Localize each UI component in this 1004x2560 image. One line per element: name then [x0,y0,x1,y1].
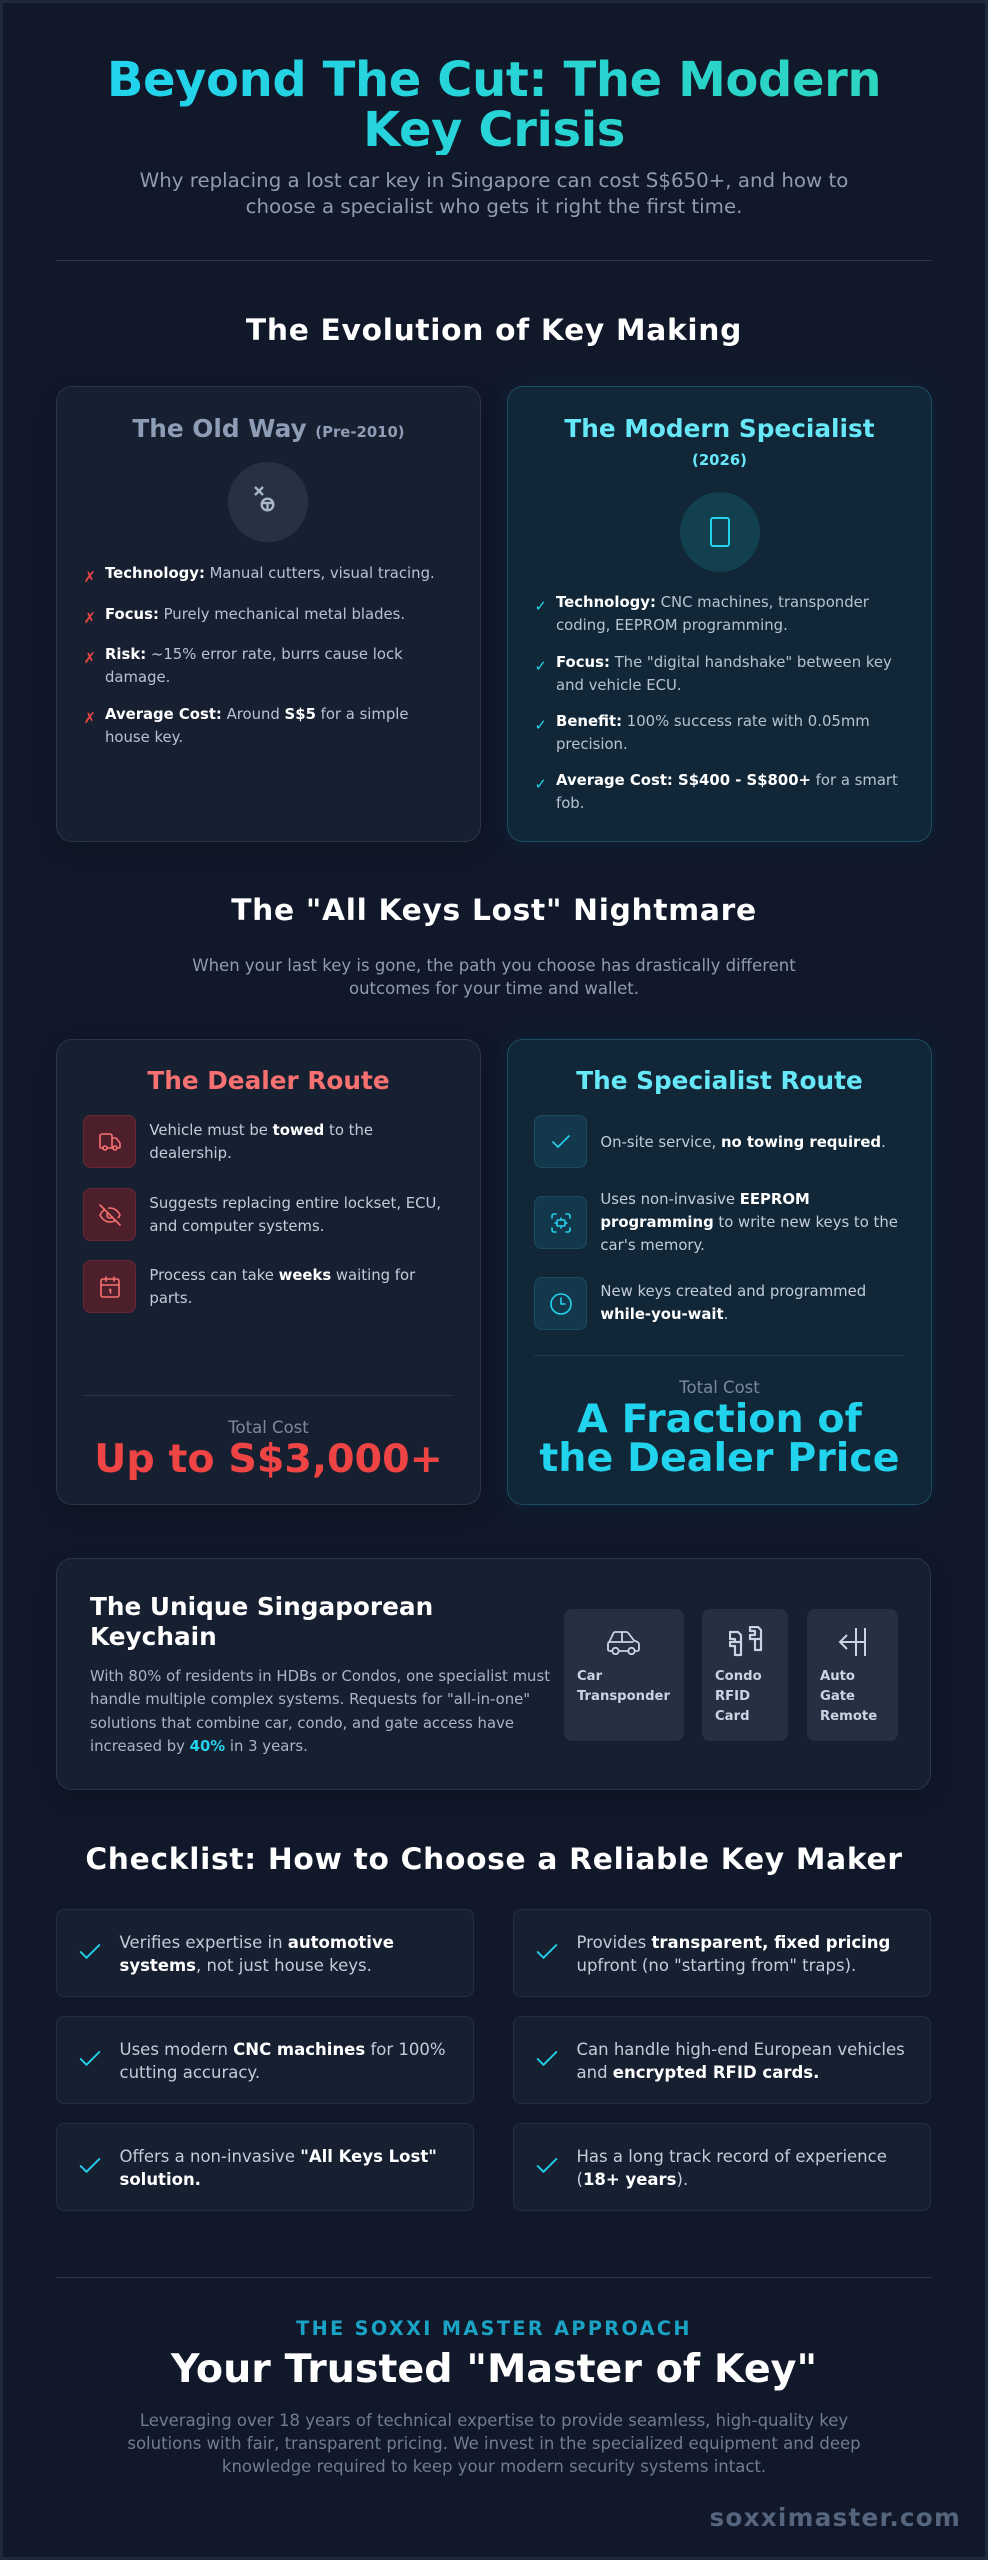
section intro: outcomes for your time and wallet. [349,979,639,998]
heading: evolution: The Evolution of Key Making [246,312,742,348]
total cost value: Up to S$3,000+ [94,1436,443,1482]
step text [149,1266,416,1306]
step text: while-you-wait. [600,1304,728,1322]
keychain text [90,1667,550,1755]
chip label: Car [577,1669,602,1684]
step: towed [83,1115,373,1168]
item: average cost: house key. [105,728,183,746]
item: average cost: ✓ [534,774,547,792]
check item 5 [56,2123,474,2211]
check item 3: cutting accuracy. [120,2063,260,2082]
icon: eye off [83,1188,136,1241]
panel: singaporean keychain [56,1558,931,1790]
step: eeprom [534,1190,898,1254]
icon: scan chip [534,1196,587,1249]
total cost label: Total Cost [679,1378,760,1396]
check item 4: and encrypted RFID cards. [576,2063,819,2082]
step text: dealership. [149,1144,232,1162]
subtitle: choose a specialist who gets it right the first time. [246,195,742,218]
check item 2 [513,1909,931,1997]
check item 1 [56,1909,474,1997]
section intro: When your last key is gone, the path you choose has drastically different [192,956,796,975]
icon: car [607,1631,640,1655]
footer text: solutions with fair, transparent pricing. We invest in the specialized equipment and deep [127,2434,861,2453]
keychain heading: Keychain [90,1622,217,1650]
panel: dealer route [56,1039,481,1505]
step text: On-site service, no towing required. [600,1132,886,1150]
icon: smart fob [680,492,760,572]
check item 4: Can handle high-end European vehicles [576,2040,905,2059]
item: technology [534,592,869,634]
old way heading: The Old Way (Pre-2010) [132,414,405,442]
item: benefit: ✓ [534,716,547,734]
item: average cost: Average Cost: S$400 - S$800+ for a smart [556,770,898,788]
chip label: Card [715,1709,750,1724]
keychain heading [90,1592,433,1650]
icon: clock [534,1277,587,1330]
item: technology: Technology: Manual cutters, visual tracing. [105,564,435,582]
step: on-site [534,1115,886,1168]
keychain text: increased by 40% in 3 years. [90,1737,308,1755]
step text: New keys created and programmed [600,1282,866,1300]
chip label [715,1669,762,1724]
total cost value [539,1396,900,1481]
keychain heading: The Unique Singaporean [90,1592,433,1620]
panel: specialist route [507,1039,932,1505]
chip label [820,1669,877,1724]
check item 3: Uses modern CNC machines for 100% [120,2040,446,2059]
item: benefit [534,712,870,752]
step: replacement [83,1188,441,1241]
modern heading: (2026) [692,451,747,469]
check item 1: systems, not just house keys. [120,1956,372,1975]
item: focus: ✓ [534,656,547,674]
item: average cost [84,705,409,746]
chip label: Condo [715,1669,762,1684]
icon: calendar [83,1260,136,1313]
panel: the modern specialist [507,386,932,842]
item: technology: Technology: CNC machines, transponder [556,592,869,610]
title [96,55,892,155]
checklist grid [56,1909,931,2211]
check item 3 [56,2016,474,2104]
step text: Process can take weeks waiting for [149,1266,415,1284]
check item 6: Has a long track record of experience [576,2147,887,2166]
item: focus: and vehicle ECU. [556,676,682,694]
icon: gate remote [838,1628,866,1656]
dealer heading: The Dealer Route [147,1066,390,1094]
step: while you wait [534,1277,866,1330]
total cost value: A Fraction of [577,1396,862,1442]
step text [149,1120,373,1162]
item: average cost: Average Cost: Around S$5 for a simple [105,705,409,723]
chip label: Transponder [577,1689,670,1704]
modern heading [564,414,875,469]
total cost value: the Dealer Price [539,1435,900,1481]
title: Key Crisis [363,102,625,158]
item: average cost: fob. [556,794,584,812]
step text: car's memory. [600,1236,705,1254]
footer text [127,2411,861,2476]
icon: truck [83,1115,136,1168]
check item 2: upfront (no "starting from" traps). [576,1956,856,1975]
icon: old key [228,462,308,542]
section intro [192,956,796,998]
chip label: Remote [820,1709,877,1724]
chip: auto gate remote [807,1609,898,1741]
step text: Uses non-invasive EEPROM [600,1190,810,1208]
item: focus: Focus: The "digital handshake" between key [556,652,892,670]
step text [600,1282,866,1322]
item: focus: ✗ [84,609,96,627]
footer heading: Your Trusted "Master of Key" [171,2346,817,2392]
specialist heading: The Specialist Route [576,1066,863,1094]
heading: all keys lost: The "All Keys Lost" Nightmare [231,893,757,928]
panel: the old way [56,386,481,842]
footer eyebrow: THE SOXXI MASTER APPROACH [296,2317,692,2340]
check item 5: Offers a non-invasive "All Keys Lost" [120,2147,437,2166]
heading: checklist: Checklist: How to Choose a Reliable Key Maker [85,1842,903,1877]
chip label: Auto [820,1669,855,1684]
check item 4 [513,2016,931,2104]
modern heading: The Modern Specialist [564,414,875,442]
icon: check [534,1115,587,1168]
step text: Vehicle must be towed to the [149,1120,373,1138]
check item 2: Provides transparent, fixed pricing [576,1933,890,1952]
subtitle [140,169,848,218]
item: benefit: precision. [556,734,628,752]
item: risk: Risk: ~15% error rate, burrs cause lock [105,645,403,663]
keychain text: solutions that combine car, condo, and gate access have [90,1714,514,1732]
chip: car transponder [564,1609,684,1741]
item: technology: coding, EEPROM programming. [556,616,788,634]
step text: and computer systems. [149,1216,324,1234]
item: average cost: ✗ [84,709,96,727]
step text: Suggests replacing entire lockset, ECU, [149,1194,441,1212]
check item 1: Verifies expertise in automotive [120,1933,394,1952]
chip: condo rfid card [702,1609,788,1741]
item: benefit: Benefit: 100% success rate with 0.05mm [556,712,870,730]
chip label: Gate [820,1689,855,1704]
footer text: knowledge required to keep your modern security systems intact. [222,2457,766,2476]
item: focus: Focus: Purely mechanical metal blades. [105,605,405,623]
check item 6 [513,2123,931,2211]
chip label: RFID [715,1689,750,1704]
item: risk [84,645,403,686]
subtitle: Why replacing a lost car key in Singapore can cost S$650+, and how to [140,169,848,192]
step text [149,1194,441,1234]
check item 5: solution. [120,2170,201,2189]
item: focus [534,652,892,694]
item: average cost [534,770,898,812]
item: risk: ✗ [84,649,96,667]
step: weeks [83,1260,416,1313]
item: technology: ✗ [84,568,96,586]
total cost label: Total Cost [228,1418,309,1436]
keychain text: With 80% of residents in HDBs or Condos, one specialist must [90,1667,550,1685]
title: Beyond The Cut: The Modern [107,52,881,108]
check item 6: (18+ years). [576,2170,688,2189]
icon: rfid [729,1626,762,1656]
chip label [577,1669,670,1704]
step text [600,1190,898,1254]
footer text: Leveraging over 18 years of technical expertise to provide seamless, high-quality key [140,2411,848,2430]
item: risk: damage. [105,668,170,686]
step text: parts. [149,1288,192,1306]
website brand: soxximaster.com [709,2502,961,2532]
step text: programming to write new keys to the [600,1212,898,1230]
keychain text: handle multiple complex systems. Requests for "all-in-one" [90,1690,530,1708]
item: technology: ✓ [534,596,547,614]
